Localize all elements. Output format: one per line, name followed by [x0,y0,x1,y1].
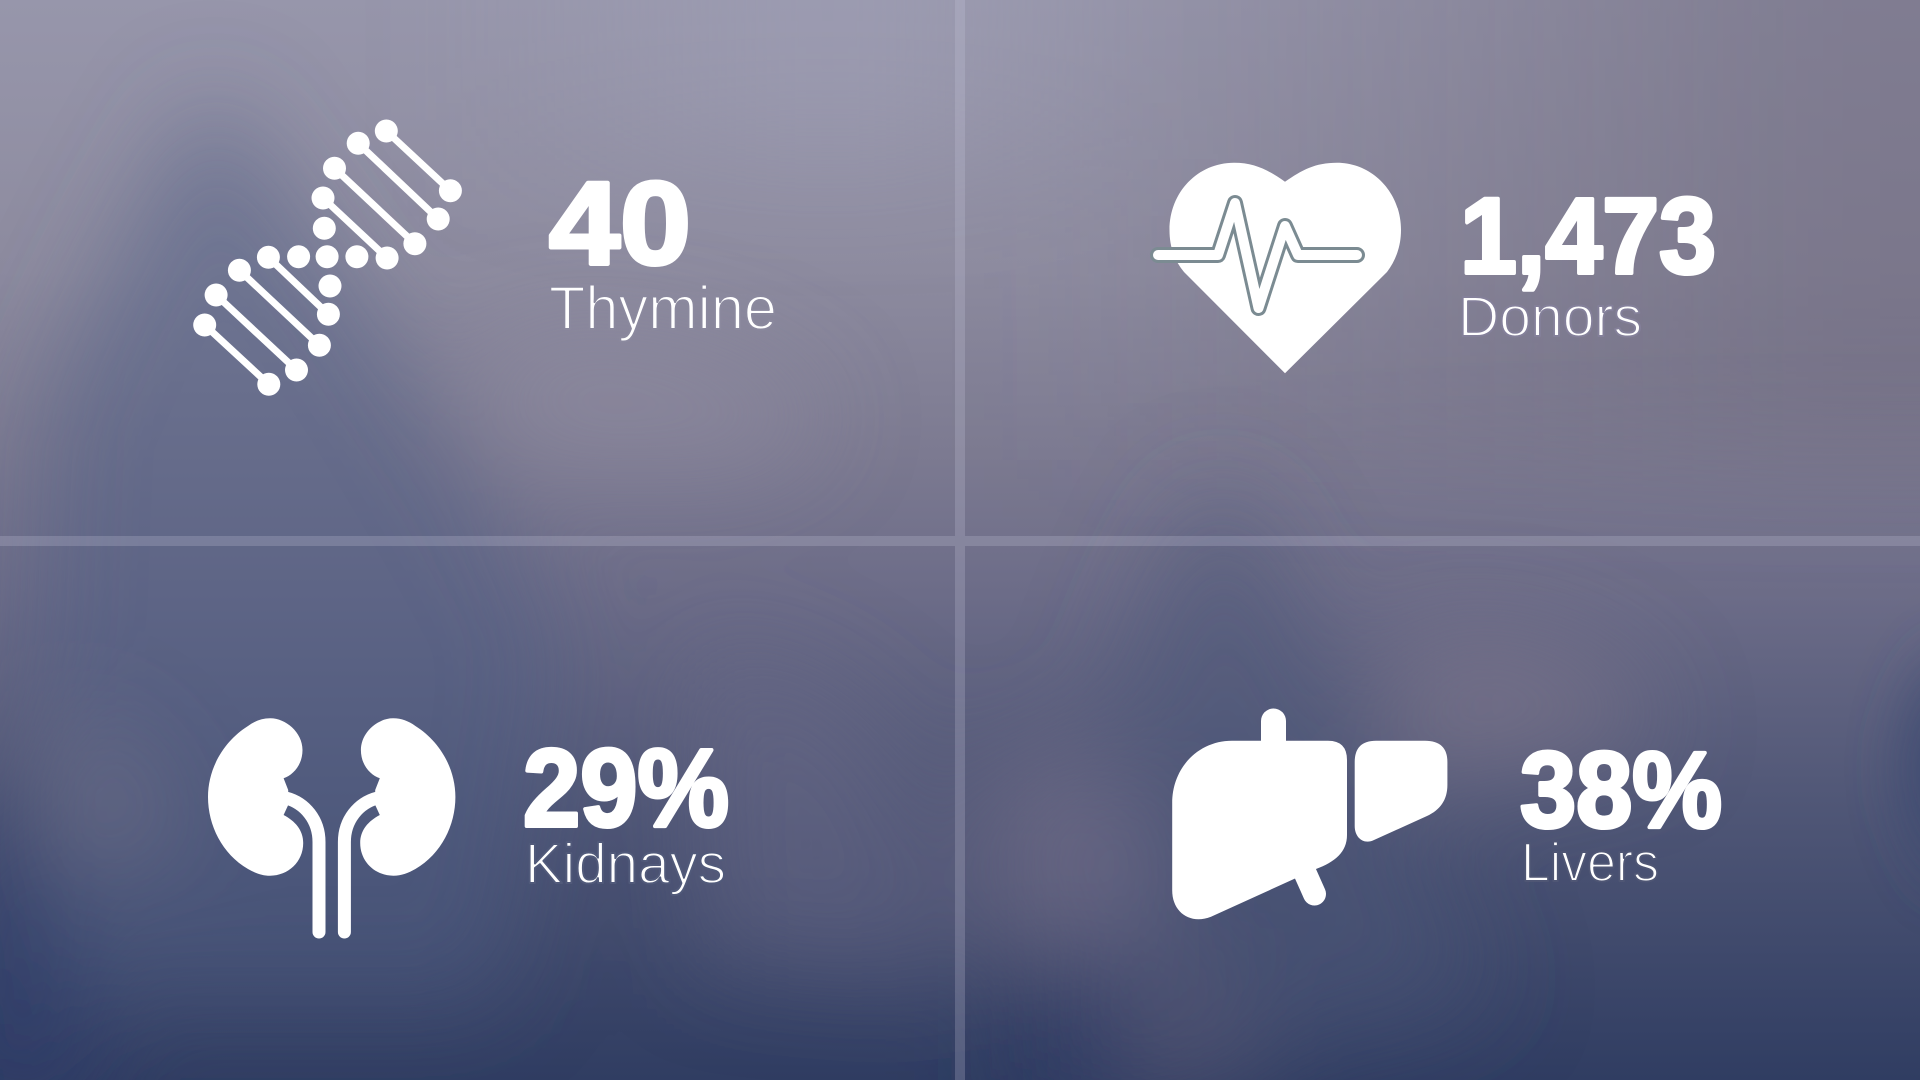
panel: livers [1172,721,1722,919]
stat: 40: 40 [549,158,691,290]
panel: donors [1158,163,1716,373]
label: Thymine: Thymine [549,274,777,342]
label: Kidnays: Kidnays [525,832,726,896]
stat: 38%: 38% [1520,729,1722,850]
stat: 1,473: 1,473 [1460,175,1716,296]
stat: 29%: 29% [523,727,729,850]
icon: liver [1172,721,1447,919]
label: Livers: Livers [1521,831,1659,893]
icon: DNA helix [193,120,462,396]
icon: kidneys [208,718,455,932]
panel: thymine [193,120,777,396]
panel: kidneys [208,718,729,932]
label: Donors: Donors [1458,285,1642,349]
icon: heart with pulse line [1158,163,1401,373]
